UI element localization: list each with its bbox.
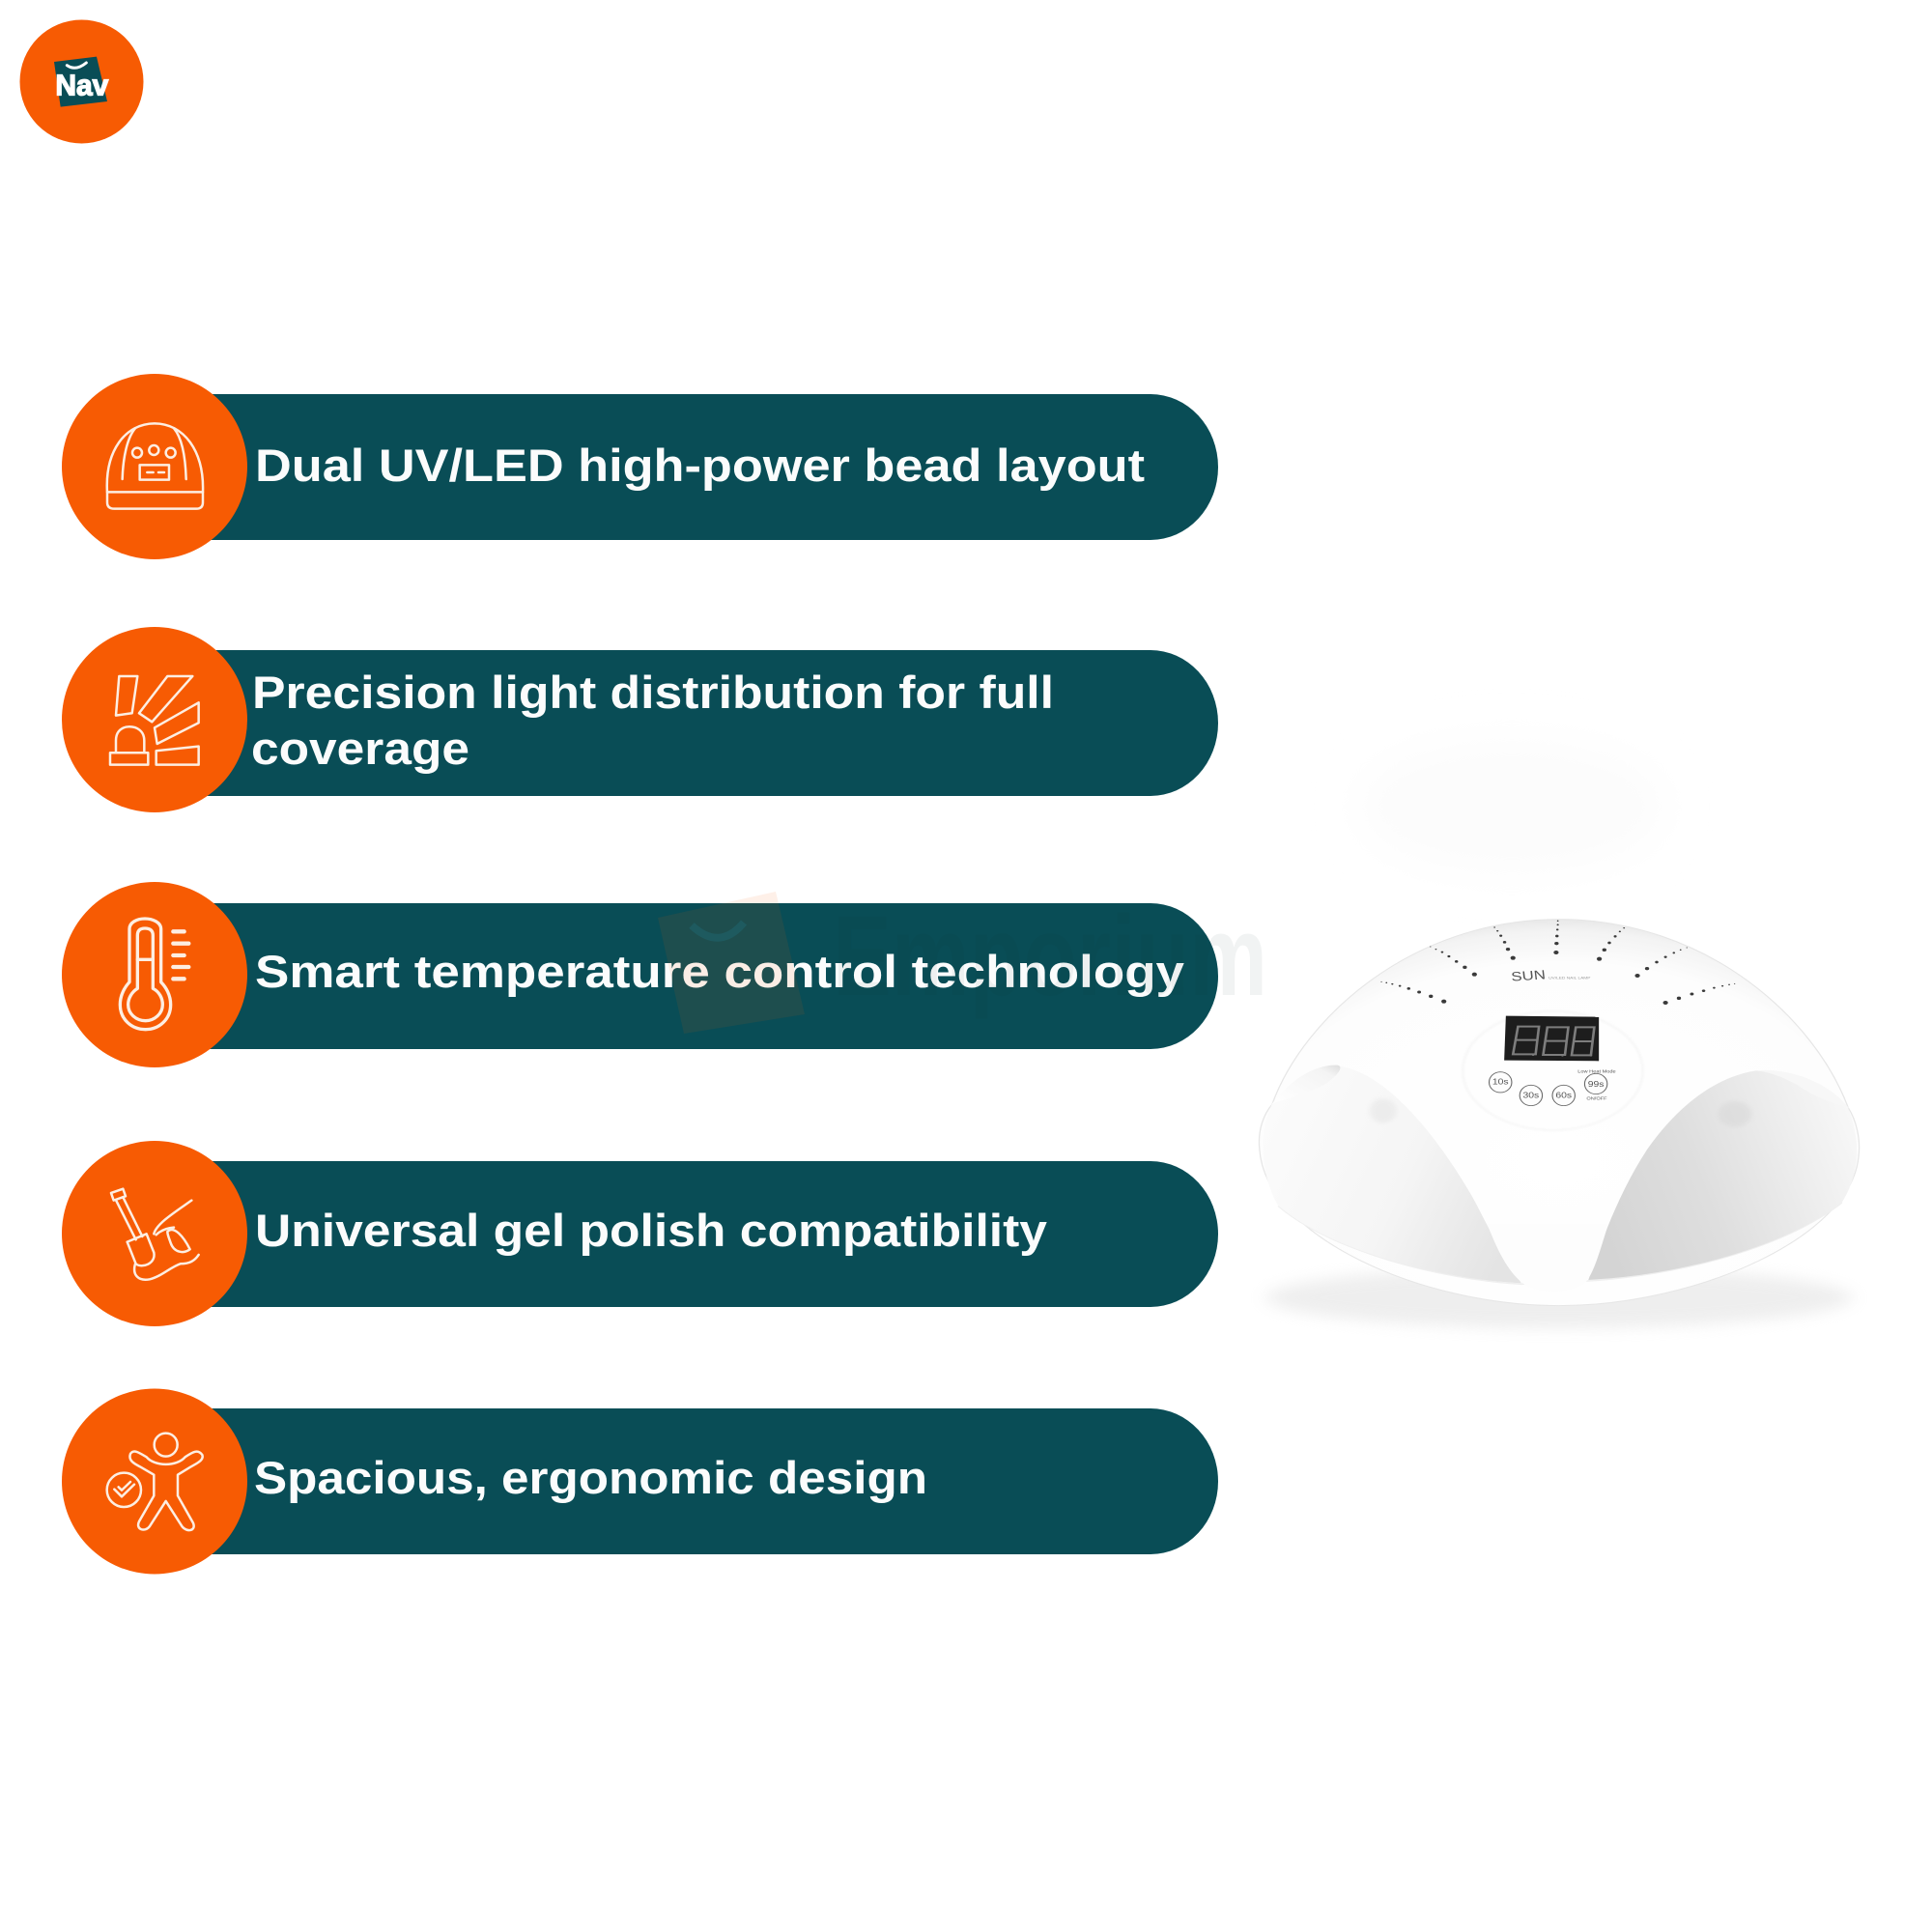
right opening (1588, 1070, 1857, 1280)
icon: thermometer (120, 919, 188, 1030)
watermark bag (658, 892, 805, 1034)
circle 4 (62, 1141, 247, 1326)
text 1: Dual UV/LED high-power bead layout (255, 440, 1145, 491)
watermark smile (692, 923, 744, 938)
button labels: Low Heat Mode (1577, 1069, 1616, 1074)
text 3: Smart temperature control technology (255, 946, 1184, 997)
base lip line (1278, 1203, 1842, 1284)
icon: light distribution (110, 676, 199, 765)
logo badge: Nav (55, 69, 108, 101)
bar 5 (155, 1408, 1218, 1554)
button labels: 10s (1492, 1078, 1509, 1086)
icon: nail lamp (107, 423, 203, 509)
watermark word: Emporium (833, 893, 1267, 1020)
icon: ergonomic figure (107, 1434, 203, 1530)
bar 4 (155, 1161, 1218, 1307)
circle 5 (62, 1389, 247, 1575)
brand text: SUN (1511, 968, 1547, 984)
center tongue (1487, 1224, 1608, 1292)
circle 3 (62, 882, 247, 1067)
circle 2 (62, 627, 247, 812)
feature row 3 (62, 882, 1218, 1067)
lamp body (1259, 920, 1860, 1306)
product: nail lamp (1259, 920, 1860, 1328)
button labels: 99s (1588, 1080, 1605, 1089)
bar 1 (155, 394, 1218, 540)
interior bump left (1370, 1098, 1397, 1123)
faint ghost smudge above lamp (1357, 739, 1666, 874)
bar 2 (155, 650, 1218, 796)
LED display (1504, 1016, 1599, 1061)
text 4: Universal gel polish compatibility (255, 1205, 1047, 1256)
lamp shadow (1265, 1267, 1853, 1328)
left flap (1272, 1065, 1340, 1104)
interior bump right (1719, 1101, 1751, 1127)
button labels: 30s (1523, 1092, 1540, 1099)
left opening (1264, 1065, 1521, 1283)
small model text: UV/LED NAIL LAMP (1548, 976, 1590, 980)
button labels (1492, 1069, 1616, 1101)
text 2: Precision light distribution for full (252, 667, 1054, 718)
right flap (1756, 1070, 1849, 1108)
button labels: ON/OFF (1586, 1096, 1607, 1101)
feature row 4 (62, 1141, 1218, 1326)
feature row 2 (62, 627, 1218, 812)
watermark (658, 892, 1267, 1034)
feature row 5 (62, 1389, 1218, 1575)
logo badge (19, 19, 143, 143)
text 2 second line: coverage (251, 723, 469, 774)
LED dots (1380, 921, 1735, 1005)
feature row 1 (62, 374, 1218, 559)
button labels: 60s (1555, 1092, 1572, 1099)
timer buttons (1490, 1072, 1607, 1106)
text 5: Spacious, ergonomic design (254, 1452, 927, 1503)
icon: gel polish brush (111, 1189, 199, 1280)
bar 3 (155, 903, 1218, 1049)
circle 1 (62, 374, 247, 559)
control panel (1463, 1011, 1643, 1130)
